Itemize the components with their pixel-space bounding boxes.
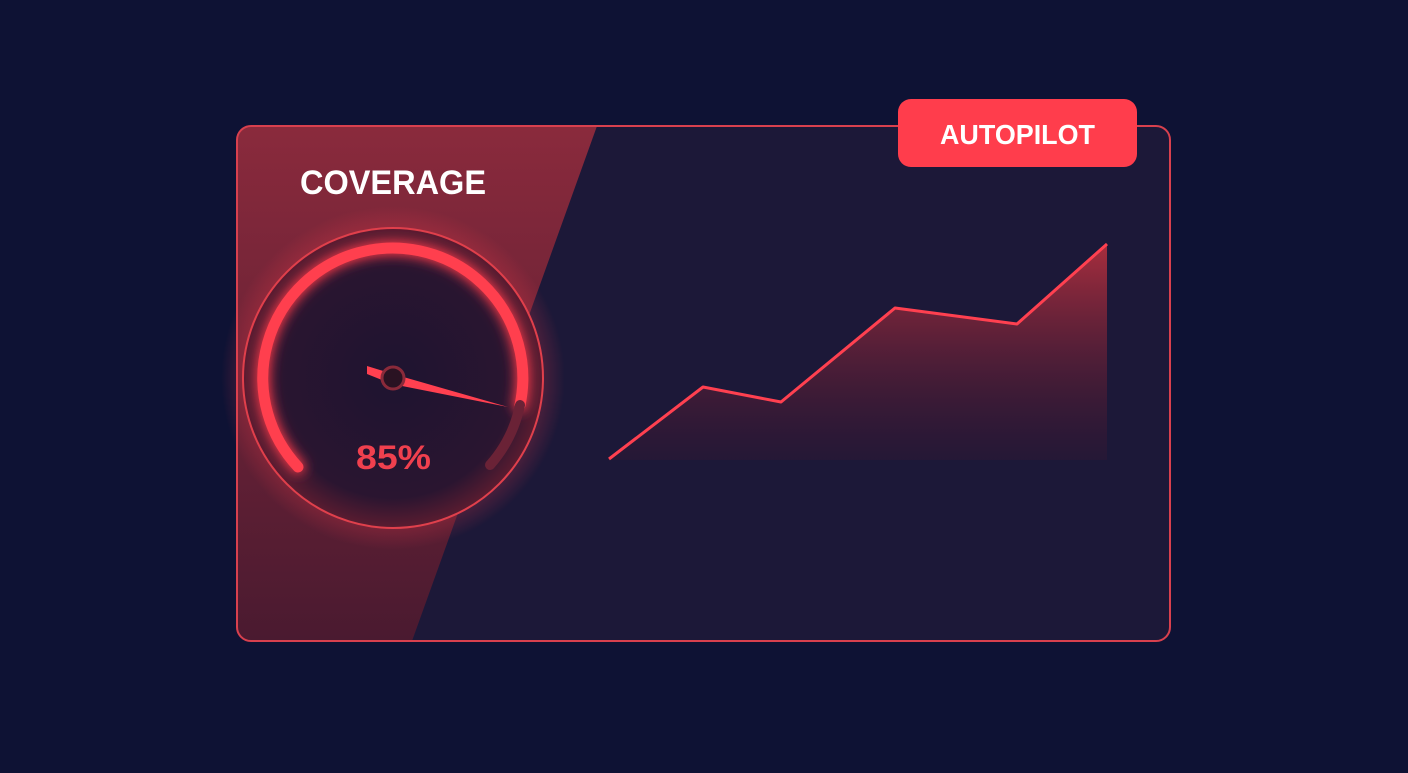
needle: [367, 366, 508, 407]
title: coverage: COVERAGE: [300, 164, 486, 202]
area chart: [609, 244, 1107, 460]
panel: dashboard card: [237, 126, 1170, 641]
gauge arc: [263, 248, 523, 467]
value label: 85%: [356, 439, 431, 477]
gauge: [221, 206, 565, 550]
badge: autopilot: [898, 99, 1137, 167]
badge: autopilot: AUTOPILOT: [940, 119, 1095, 150]
